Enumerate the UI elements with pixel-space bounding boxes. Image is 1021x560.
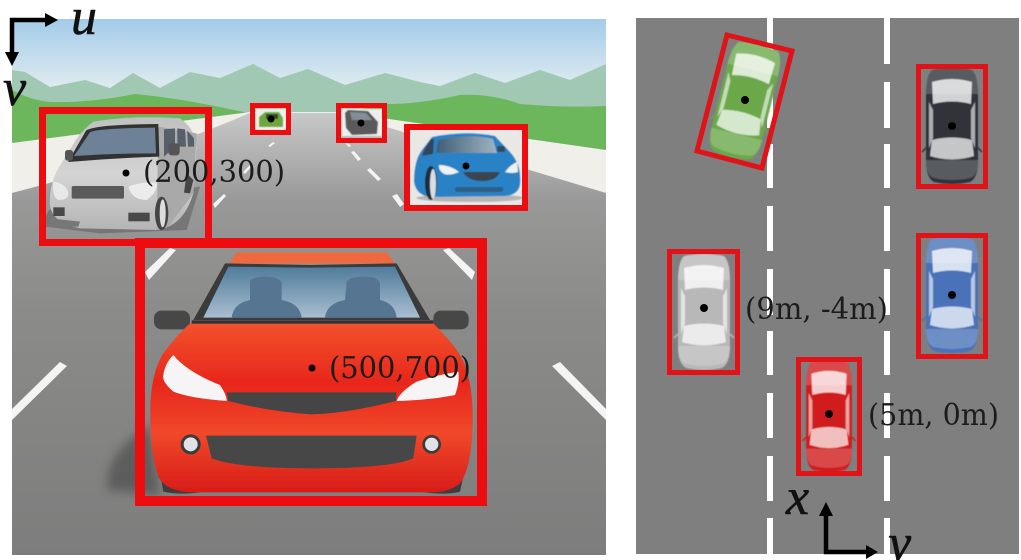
car: green top view xyxy=(702,37,788,165)
car: small distant gray xyxy=(342,109,382,136)
label: van pixel coordinates: (200,300) xyxy=(143,155,285,190)
bounding box: blue car xyxy=(918,236,986,356)
bounding box: blue car xyxy=(407,127,525,208)
label: silver car world coordinates: (9m, -4m) xyxy=(745,292,888,327)
axis label: x: x xyxy=(785,469,809,526)
bounding box: van xyxy=(42,110,208,242)
bounding box: small green car xyxy=(252,106,288,132)
bounding box: red car xyxy=(140,243,482,501)
label: red car world coordinates: (5m, 0m) xyxy=(868,398,999,433)
road surface xyxy=(12,113,606,555)
car: silver top view xyxy=(674,254,734,370)
center dots xyxy=(700,96,956,418)
axes: world x-y xyxy=(785,469,912,560)
distant mountains xyxy=(12,64,606,125)
lane markings xyxy=(12,141,606,420)
car: black top view xyxy=(922,68,982,184)
panel: image-plane road scene xyxy=(12,19,606,555)
axis label: v: v xyxy=(3,60,27,117)
road surface xyxy=(636,18,1019,554)
car: silver van xyxy=(45,117,200,233)
car: red top view xyxy=(803,360,855,472)
bounding box: small gray car xyxy=(338,106,384,140)
arrow: x and y axes xyxy=(826,515,868,552)
panel: bird's-eye road view xyxy=(636,18,1019,554)
green hills xyxy=(12,90,606,160)
car: blue top view xyxy=(922,237,982,353)
car: blue sedan xyxy=(408,129,524,207)
bounding box: red car xyxy=(798,360,860,474)
bounding box: green car rotated xyxy=(697,35,792,168)
center dots xyxy=(122,116,470,372)
label: red car pixel coordinates: (500,700) xyxy=(329,351,471,386)
car: red hatchback xyxy=(107,252,473,495)
bounding box: silver car xyxy=(670,252,738,372)
bounding box: black car xyxy=(918,66,986,186)
axes: image u-v xyxy=(3,0,97,117)
road shoulders xyxy=(12,112,606,200)
lane dashes xyxy=(770,18,887,554)
sky xyxy=(12,19,606,111)
arrow: u and v axes xyxy=(12,20,46,56)
car: small distant green xyxy=(256,109,286,130)
